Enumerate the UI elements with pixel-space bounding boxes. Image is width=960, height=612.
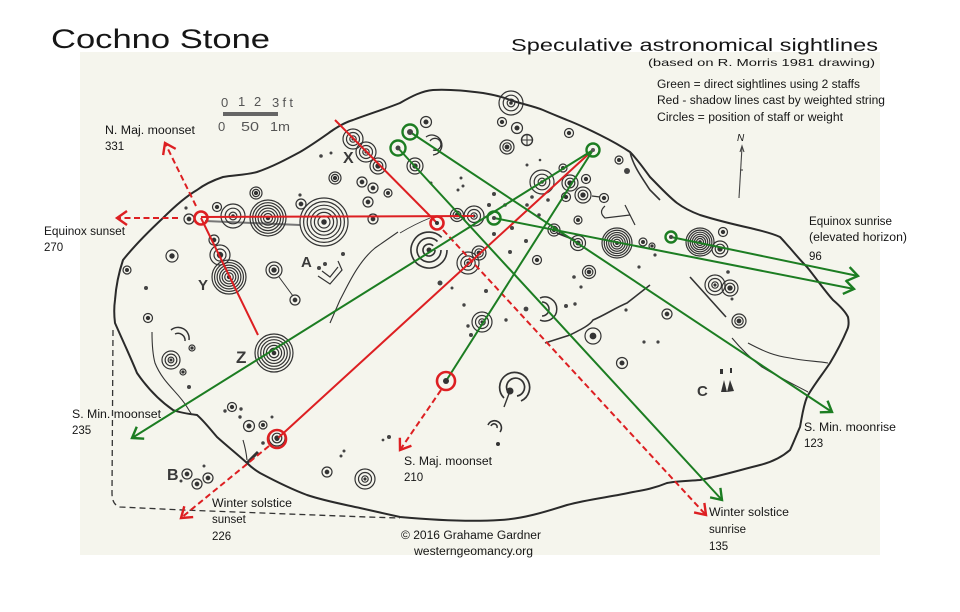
- map letters: Y: [198, 277, 208, 294]
- north arrow: [737, 133, 745, 198]
- label: Winter solstice sunrise: Winter solstice: [709, 507, 789, 519]
- subtitle: Speculative astronomical sightlines: [511, 35, 878, 55]
- map letters: A: [301, 254, 312, 271]
- map letters: [167, 150, 708, 484]
- legend: Red - shadow lines cast by weighted string: [657, 95, 885, 107]
- scale bar: 3ft: [272, 95, 293, 110]
- credit: westerngeomancy.org: [413, 546, 533, 558]
- label: S. Min. moonrise: 123: [804, 438, 823, 450]
- rock carvings: cup and ring marks: [123, 91, 746, 489]
- south-central group: [472, 312, 492, 332]
- scale bar: 1: [238, 94, 245, 109]
- scale bar: 0: [218, 119, 225, 134]
- label: Winter solstice sunset: 226: [212, 531, 231, 543]
- dashed boundary: [112, 330, 400, 518]
- paper background of the drawing: [80, 52, 880, 555]
- credit: [401, 530, 541, 558]
- map letters: X: [343, 150, 354, 167]
- label: Equinox sunset: 270: [44, 242, 63, 254]
- legend: Circles = position of staff or weight: [657, 112, 844, 124]
- green staff position circles: [390, 124, 676, 242]
- label: Winter solstice sunrise: sunrise: [709, 524, 746, 536]
- label: Equinox sunrise: 96: [809, 251, 822, 263]
- label: Winter solstice sunset: sunset: [212, 514, 247, 526]
- scale bar: 50: [241, 119, 259, 134]
- label: S. Min. moonrise: S. Min. moonrise: [804, 422, 896, 434]
- scale bar: 1m: [270, 119, 290, 134]
- label: S. Maj. moonset: 210: [404, 472, 423, 484]
- central-east group: [530, 170, 554, 194]
- legend: [657, 79, 885, 124]
- source note: (based on R. Morris 1981 drawing): [648, 57, 875, 69]
- map letters: C: [697, 383, 708, 400]
- green sightlines: [132, 132, 858, 500]
- label: S. Min. moonset: S. Min. moonset: [72, 409, 162, 421]
- west group: [221, 204, 245, 228]
- label: Winter solstice sunrise: [709, 507, 789, 553]
- label: Equinox sunrise: Equinox sunrise: [809, 216, 892, 228]
- fissures: [152, 152, 828, 463]
- label: N. Maj. moonset: 331: [105, 141, 124, 153]
- label: Equinox sunrise: [809, 216, 907, 263]
- label: S. Maj. moonset: [404, 456, 493, 484]
- label: S. Min. moonset: 235: [72, 425, 91, 437]
- scale bar: 2: [254, 94, 261, 109]
- red weight position circles: [194, 212, 455, 448]
- label: Equinox sunset: [44, 226, 126, 254]
- label: Winter solstice sunset: Winter solstice: [212, 498, 292, 510]
- label: Equinox sunset: Equinox sunset: [44, 226, 126, 238]
- southwest group: [144, 314, 152, 322]
- stone outline: [114, 90, 849, 521]
- legend: Green = direct sightlines using 2 staffs: [657, 79, 860, 91]
- label: S. Min. moonrise: [804, 422, 896, 450]
- label: N. Maj. moonset: [105, 125, 196, 153]
- north arrow: N: [737, 133, 745, 144]
- north group: [420, 116, 432, 128]
- credit: © 2016 Grahame Gardner: [401, 530, 541, 542]
- label: Winter solstice sunrise: 135: [709, 541, 728, 553]
- label: Winter solstice sunset: [212, 498, 292, 543]
- carving C marks: [720, 368, 734, 392]
- scale bar: [218, 94, 293, 134]
- map letters: B: [167, 467, 179, 484]
- red dashed projections: [117, 143, 706, 518]
- label: N. Maj. moonset: N. Maj. moonset: [105, 125, 196, 137]
- title: Cochno Stone: [51, 24, 270, 54]
- red shadow lines: [117, 120, 706, 518]
- label: S. Maj. moonset: S. Maj. moonset: [404, 456, 493, 468]
- scattered cup marks: [144, 152, 734, 482]
- scale bar: 0: [221, 95, 228, 110]
- label: Equinox sunrise: (elevated horizon): [809, 232, 907, 244]
- map letters: Z: [236, 348, 246, 367]
- label: S. Min. moonset: [72, 409, 162, 437]
